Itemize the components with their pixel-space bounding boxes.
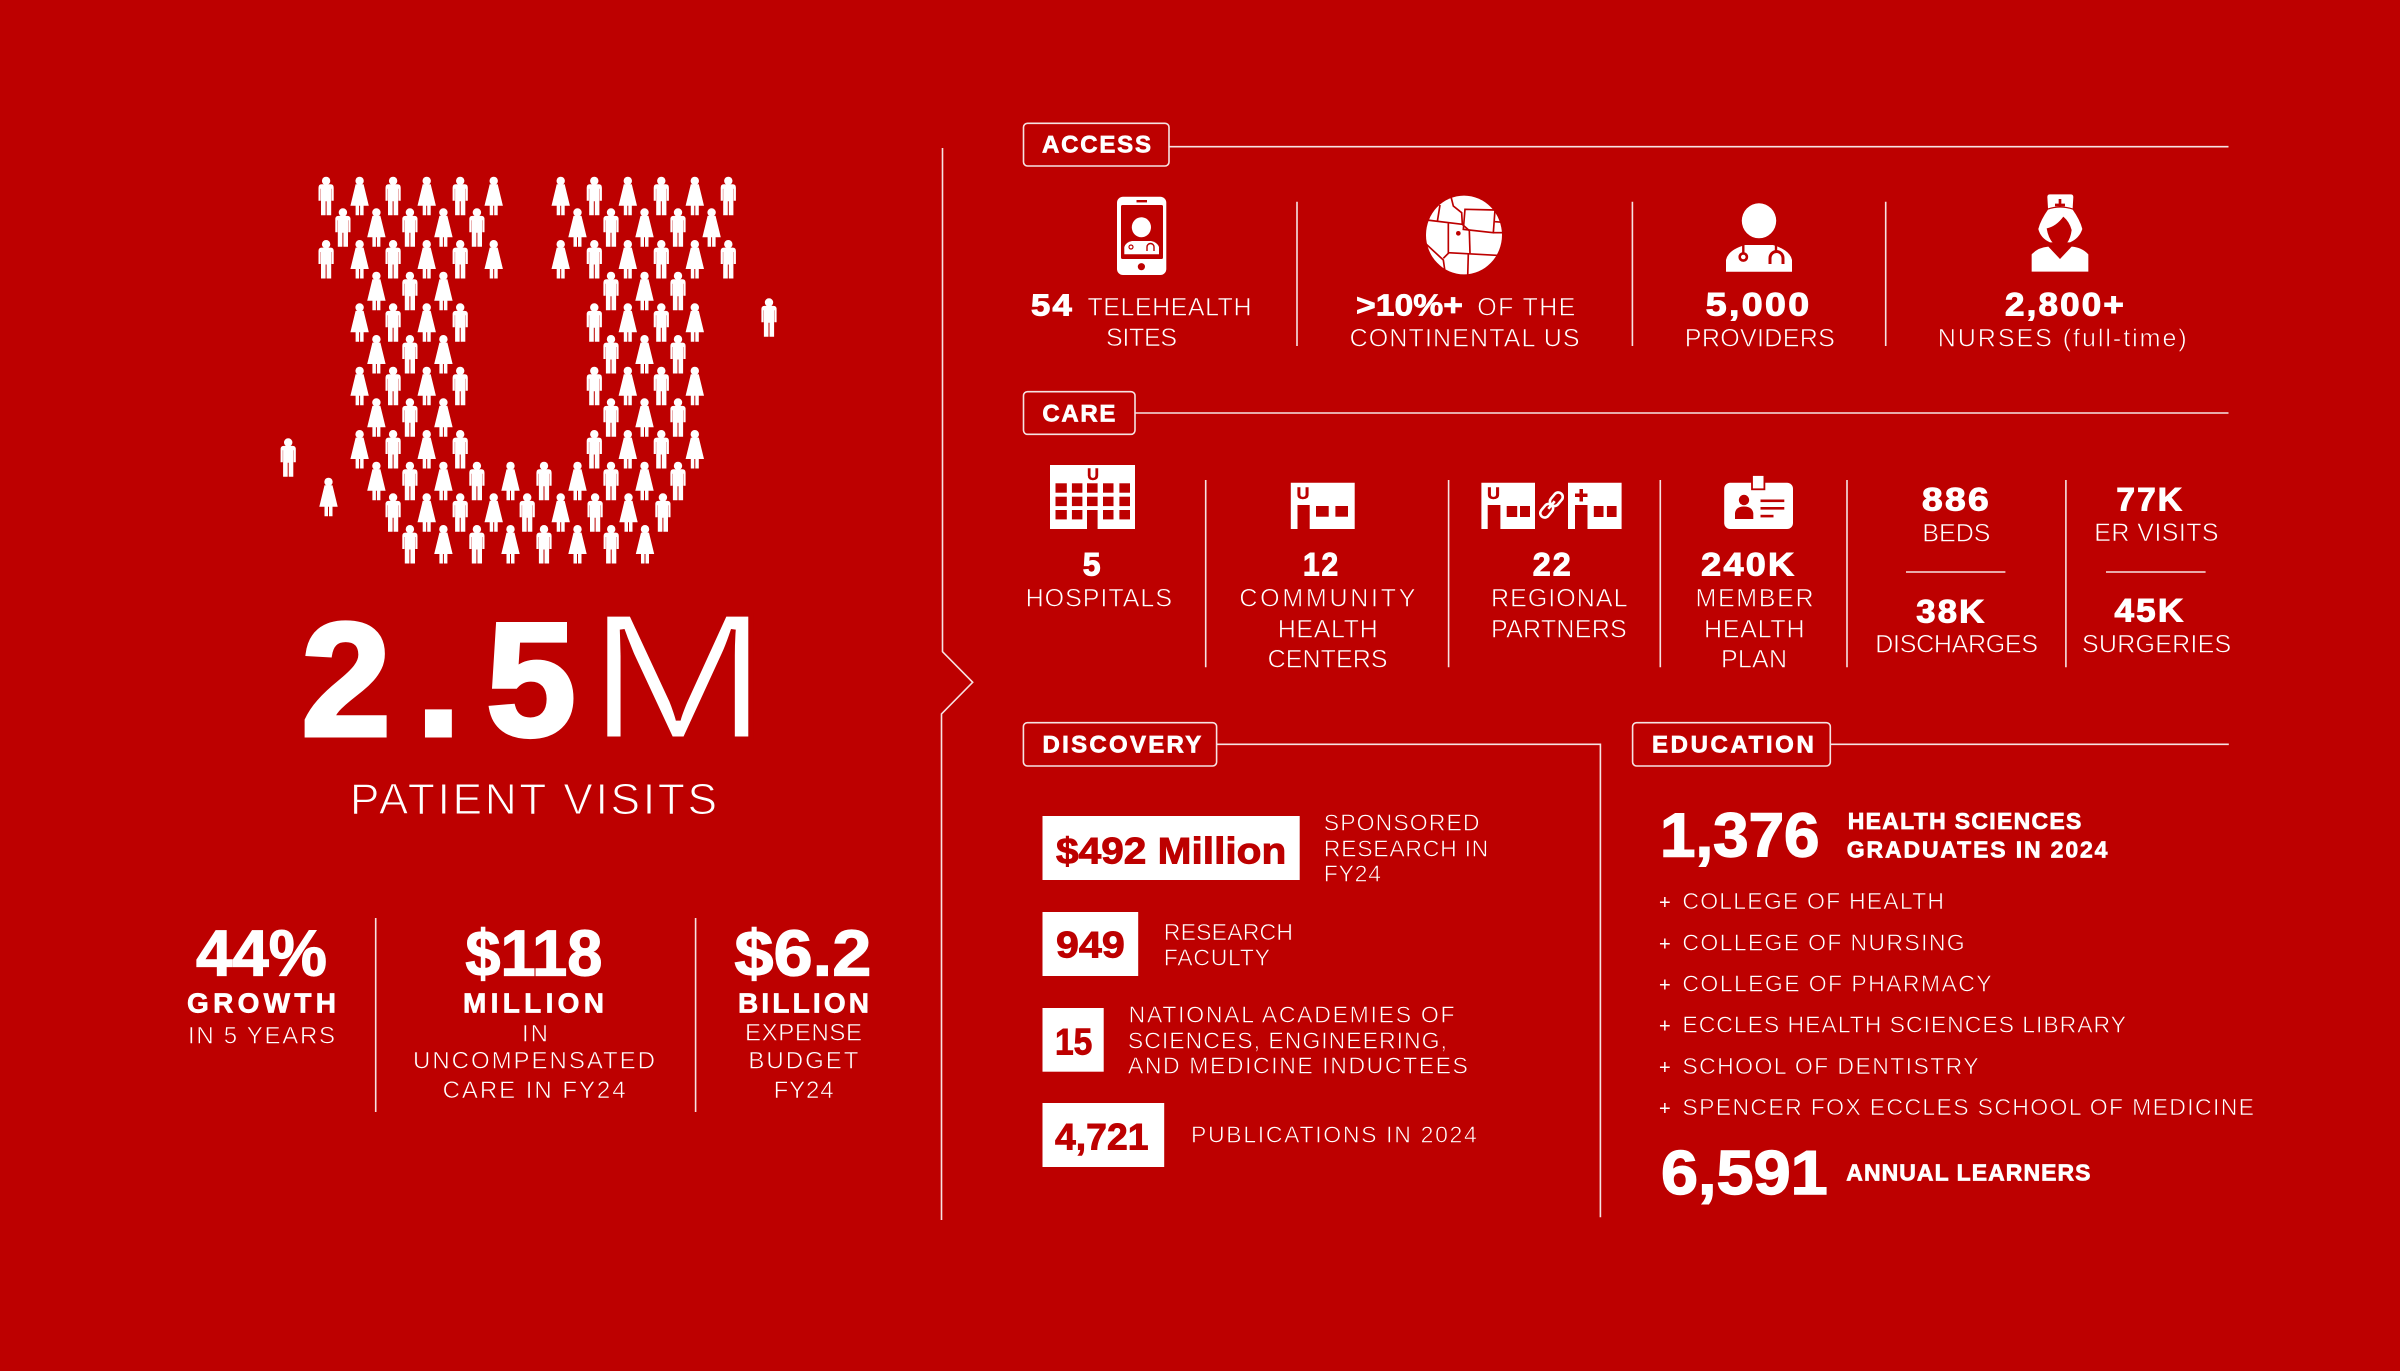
stat: ER visits and surgeries [2082,482,2231,658]
stat: nurses: NURSES (full-time) [1938,325,2187,353]
stat: providers: PROVIDERS [1685,325,1835,353]
people forming block U [281,177,777,563]
stat: continental US: >10%+ [1356,288,1463,323]
list: health sciences colleges: COLLEGE OF HEALTH [1682,888,1944,914]
stat: beds and discharges: BEDS [1922,520,1990,548]
stat: national academies inductees: NATIONAL ACADEMIES OF [1129,1002,1455,1028]
list: health sciences colleges: COLLEGE OF PHARMACY [1682,971,1992,997]
stat: member health plan: 240K [1701,547,1796,583]
stat: sponsored research: FY24 [1324,861,1381,887]
stat: graduates: 1,376 [1660,802,1820,871]
stat: $6.2 billion: FY24 [774,1077,834,1104]
stat: $6.2 billion: $6.2 [734,916,871,989]
stat: $118 million: $118 [465,916,602,989]
list: health sciences colleges: + [1659,1057,1671,1079]
stat: publications: PUBLICATIONS IN 2024 [1191,1121,1477,1147]
stat: research faculty: 949 [1056,924,1125,965]
stat: $118 million: IN [522,1020,548,1047]
icon: telehealth phone [1117,197,1166,275]
stat: national academies inductees: 15 [1055,1021,1092,1062]
stat: research faculty [1042,912,1293,976]
stat: annual learners: ANNUAL LEARNERS [1846,1160,2090,1186]
stat: beds and discharges: 38K [1916,593,1986,629]
list: health sciences colleges: ECCLES HEALTH SCIENCES LIBRARY [1682,1011,2126,1037]
stat: community health centers: HEALTH [1278,616,1378,644]
heading: education: EDUCATION [1652,731,1814,758]
stat: 44% growth [187,916,336,1050]
stat: continental US [1350,288,1580,353]
stat: $118 million: UNCOMPENSATED [413,1047,655,1074]
stat: national academies inductees [1042,1002,1468,1078]
stat: publications: 4,721 [1055,1116,1148,1157]
stat: 44% growth: IN 5 YEARS [188,1023,335,1050]
stat: member health plan [1696,547,1814,674]
stat: ER visits and surgeries: 45K [2114,593,2185,629]
stat: beds and discharges: 886 [1922,482,1991,518]
stat: national academies inductees: AND MEDICINE INDUCTEES [1128,1052,1468,1078]
stat: annual learners [1661,1139,2090,1208]
stat: sponsored research: RESEARCH IN [1324,836,1488,862]
stat: telehealth sites: 54 [1031,288,1074,323]
care dividers [1206,480,2066,667]
panel: access [1024,123,2228,353]
stat: community health centers: 12 [1303,547,1340,583]
list: health sciences colleges: + [1659,892,1671,914]
stat: member health plan: PLAN [1721,646,1787,674]
heading: education [1633,723,2229,766]
icon: member ID card [1724,475,1793,529]
stat: telehealth sites: TELEHEALTH [1088,294,1252,322]
stat: research faculty: RESEARCH [1164,919,1293,945]
stat: hospitals [1026,547,1172,613]
stat dividers [376,918,696,1112]
patient visits label: PATIENT VISITS [350,775,717,824]
heading: access [1024,123,2228,166]
stat: graduates: HEALTH SCIENCES [1848,808,2081,834]
stat: community health centers: CENTERS [1268,646,1388,674]
list: health sciences colleges: + [1659,1098,1671,1120]
stat: ER visits and surgeries: ER VISITS [2094,519,2219,547]
stat: regional partners: REGIONAL [1491,585,1628,613]
icon: linked regional partner buildings: U [1487,484,1500,503]
stat: sponsored research: SPONSORED [1324,810,1480,836]
access dividers [1297,202,1886,346]
stat: hospitals: 5 [1083,547,1103,583]
icon: nurse [2032,194,2088,272]
stat: national academies inductees: SCIENCES, ENGINEERING, [1128,1027,1447,1053]
stat: 44% growth: 44% [196,916,327,989]
icon: hospital [1050,465,1135,529]
stat: beds and discharges [1875,482,2038,659]
panel: discovery [1023,723,1600,1217]
stat: graduates: GRADUATES IN 2024 [1847,837,2108,863]
stat: regional partners: 22 [1533,547,1573,583]
list: health sciences colleges [1659,888,2254,1120]
stat: annual learners: 6,591 [1661,1139,1828,1208]
stat: $6.2 billion: BUDGET [748,1047,859,1074]
panel: care [1024,392,2231,674]
list: health sciences colleges: + [1659,975,1671,997]
list: health sciences colleges: COLLEGE OF NURSING [1682,929,1965,955]
stat: nurses [1938,287,2187,353]
icon: hospital: U [1087,465,1099,484]
stat: telehealth sites [1031,288,1252,352]
stat: ER visits and surgeries: SURGERIES [2082,630,2231,658]
icon: community health center: U [1296,484,1310,503]
stat: continental US: CONTINENTAL US [1350,325,1580,353]
stat: $6.2 billion [734,916,871,1104]
heading: care: CARE [1042,401,1115,428]
stat: member health plan: HEALTH [1704,616,1804,644]
list: health sciences colleges: + [1659,1015,1671,1037]
stat: $6.2 billion: EXPENSE [745,1020,862,1047]
icon: community health center [1291,483,1355,529]
stat: nurses: 2,800+ [2005,287,2126,323]
stat: sponsored research: $492 Million [1056,830,1286,871]
stat: $6.2 billion: BILLION [738,988,869,1019]
stat: sponsored research [1042,810,1488,887]
stat: regional partners: PARTNERS [1491,616,1627,644]
heading: discovery: DISCOVERY [1042,731,1201,758]
heading: discovery [1023,723,1600,1217]
stat: graduates [1660,802,2108,871]
headline figure 2.5M: M [587,576,769,778]
list: health sciences colleges: + [1659,933,1671,955]
icon: linked regional partner buildings [1481,483,1622,529]
stat: regional partners [1491,547,1628,644]
stat: research faculty: FACULTY [1164,945,1270,971]
stat: $118 million: CARE IN FY24 [443,1077,626,1104]
stat: member health plan: MEMBER [1696,585,1814,613]
stat: continental US: OF THE [1477,294,1575,322]
stat: community health centers: COMMUNITY [1239,585,1416,613]
stat: community health centers [1239,547,1416,674]
stat: hospitals: HOSPITALS [1026,585,1172,613]
icon: provider with stethoscope [1726,203,1792,272]
stat: $118 million: MILLION [463,988,604,1019]
heading: care [1024,392,2228,434]
headline figure 2.5M [301,576,769,778]
stat: $118 million [413,916,655,1104]
headline figure 2.5M: 2.5 [301,590,576,770]
stat: 44% growth: GROWTH [187,988,336,1019]
stat: beds and discharges: DISCHARGES [1875,631,2038,659]
stat: telehealth sites: SITES [1106,324,1177,352]
list: health sciences colleges: SPENCER FOX ECCLES SCHOOL OF MEDICINE [1682,1094,2254,1120]
stat: providers [1685,287,1835,353]
central divider with chevron arrow [942,148,973,1220]
stat: publications [1042,1103,1477,1167]
heading: access: ACCESS [1042,132,1151,159]
panel: education [1633,723,2254,1208]
icon: western US map [1426,196,1503,277]
stat: ER visits and surgeries: 77K [2116,482,2184,518]
list: health sciences colleges: SCHOOL OF DENTISTRY [1682,1053,1979,1079]
stat: providers: 5,000 [1706,287,1811,323]
